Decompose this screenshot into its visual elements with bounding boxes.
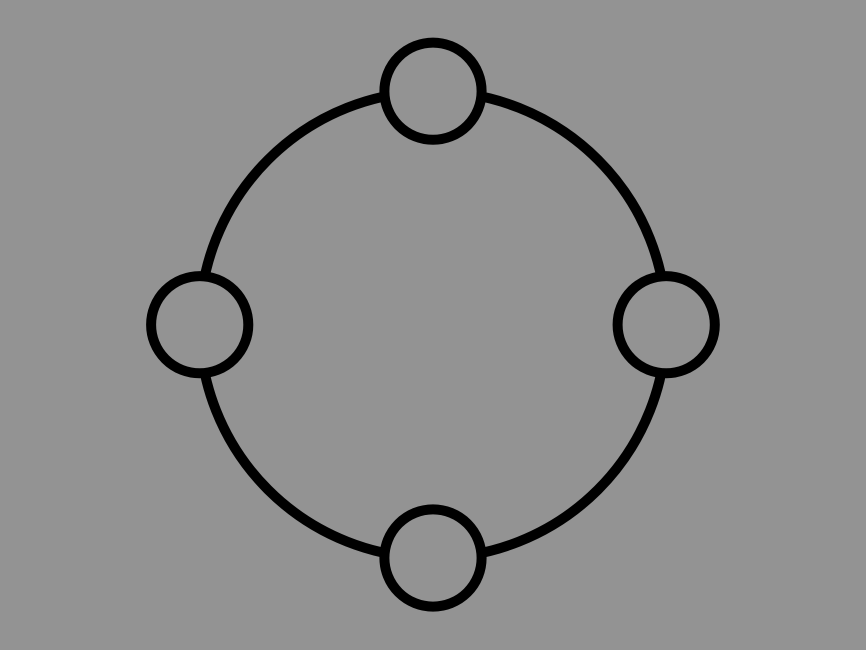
node: bottom <box>384 509 482 607</box>
node: left <box>151 276 248 373</box>
main ring <box>200 91 666 558</box>
node: top <box>384 43 482 140</box>
node: right <box>618 276 715 373</box>
